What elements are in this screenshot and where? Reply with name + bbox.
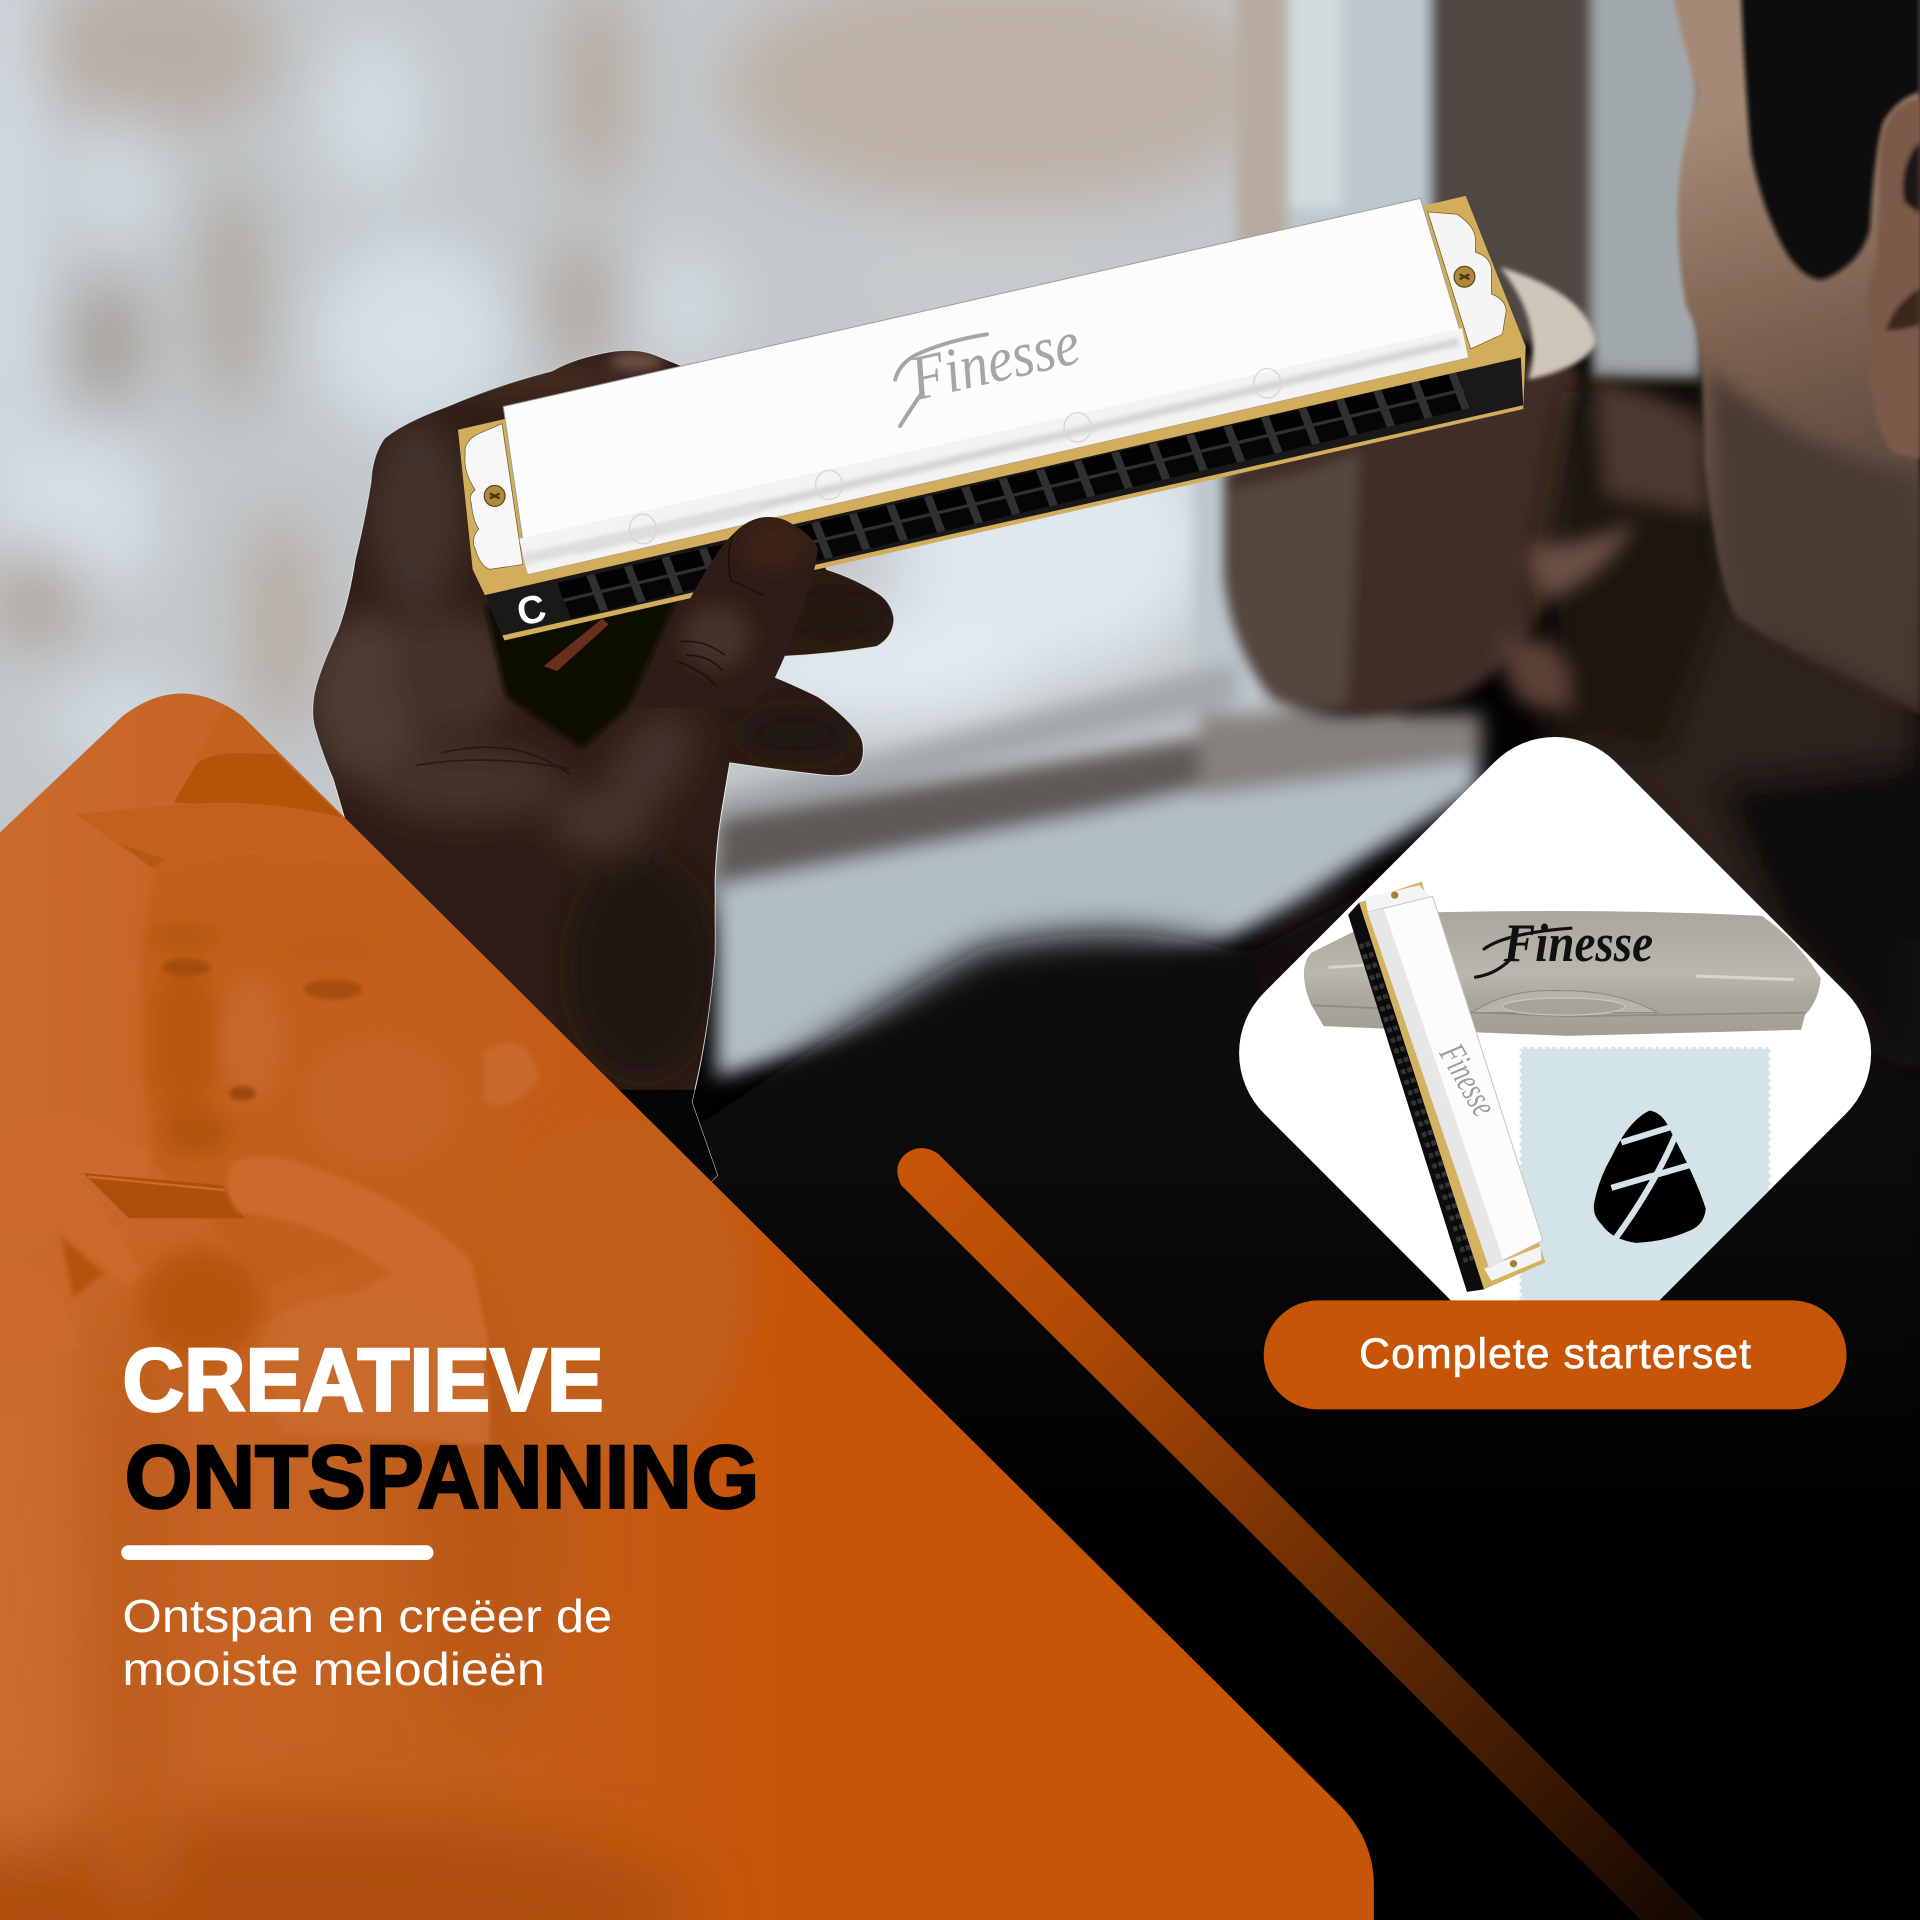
small harmonica gold frame: [1359, 882, 1545, 1289]
man: neck, hand on cup, face, hair, ear: [1501, 0, 1920, 1078]
small harmonica brand name: Finesse: [1432, 1036, 1505, 1123]
fade to black at the bottom: [0, 1102, 1920, 1920]
player shirt shoulder: [502, 1114, 747, 1457]
sleeve cuff: [619, 1090, 718, 1182]
end plate left: [465, 424, 523, 569]
thumb nail edge and wrinkles: [676, 531, 763, 686]
player face: [141, 852, 539, 1286]
subheading text: Ontspan en creëer de: [122, 1590, 612, 1642]
harmonica: main product: [458, 196, 1526, 640]
white cover plate: [503, 198, 1468, 574]
harmonica gold frame: [458, 196, 1526, 640]
small harmonica comb: [1348, 902, 1484, 1292]
divider bar: [121, 1545, 433, 1560]
heading: ontspanning: ONTSPANNING: [125, 1426, 759, 1526]
heading: creatieve: CREATIEVE: [122, 1330, 604, 1430]
end plate right: [1428, 212, 1506, 349]
finger tip highlight: [610, 351, 664, 371]
reddish sliver: [544, 618, 609, 671]
case brand name: Finesse: [1503, 913, 1653, 973]
brand name: Finesse: [902, 306, 1086, 414]
callout pill: complete starterset: [1264, 1300, 1847, 1409]
callout pill: complete starterset: Complete starterset: [1359, 1330, 1751, 1378]
player hat: [75, 698, 389, 869]
logo pick on cloth: [1594, 1111, 1706, 1244]
player hands and small harmonica: [60, 1157, 490, 1445]
subheading text: mooiste melodieën: [122, 1643, 545, 1695]
man's ear: [1866, 98, 1920, 459]
harmonica comb: [485, 358, 1523, 636]
comb holes: [557, 372, 1471, 618]
subheading text: [122, 1590, 612, 1695]
lower shirt shading: [0, 1273, 698, 1920]
small harmonica cover: [1368, 896, 1543, 1267]
hand outline with pale cut-out edge: [313, 350, 894, 1200]
cover dimples: [629, 369, 1281, 544]
storage case: [1304, 911, 1821, 1036]
man's hair: [1741, 0, 1920, 279]
cleaning cloth: [1520, 1047, 1771, 1310]
man's beard shadow: [1708, 367, 1920, 704]
duotone photo: harmonica player: [0, 686, 808, 1920]
panel: white diamond product set: [1239, 737, 1872, 1300]
small harmonica end plates: [1365, 885, 1433, 912]
panel: orange triangle with duotone photo: [0, 686, 1374, 1920]
screws: [484, 266, 1475, 506]
player eyes and nostril: [162, 959, 539, 1105]
window view: snowy trees: [0, 0, 1310, 894]
window frame: [1194, 0, 1702, 704]
hand: thumb over harmonica: [628, 517, 818, 708]
key letter C: C: [513, 587, 550, 635]
hand: palm and lower fingers behind harmonica: [306, 350, 900, 1212]
decorative orange diagonal stripe: [897, 1148, 1704, 1920]
window sill: [710, 661, 1482, 1078]
dark gap under harmonica: [485, 595, 678, 748]
dark lap and body: [490, 857, 1920, 1920]
small harmonica: [1348, 882, 1545, 1292]
palm creases: [416, 747, 569, 774]
coffee cup: [1224, 267, 1596, 713]
cover bevel: [519, 328, 1468, 574]
